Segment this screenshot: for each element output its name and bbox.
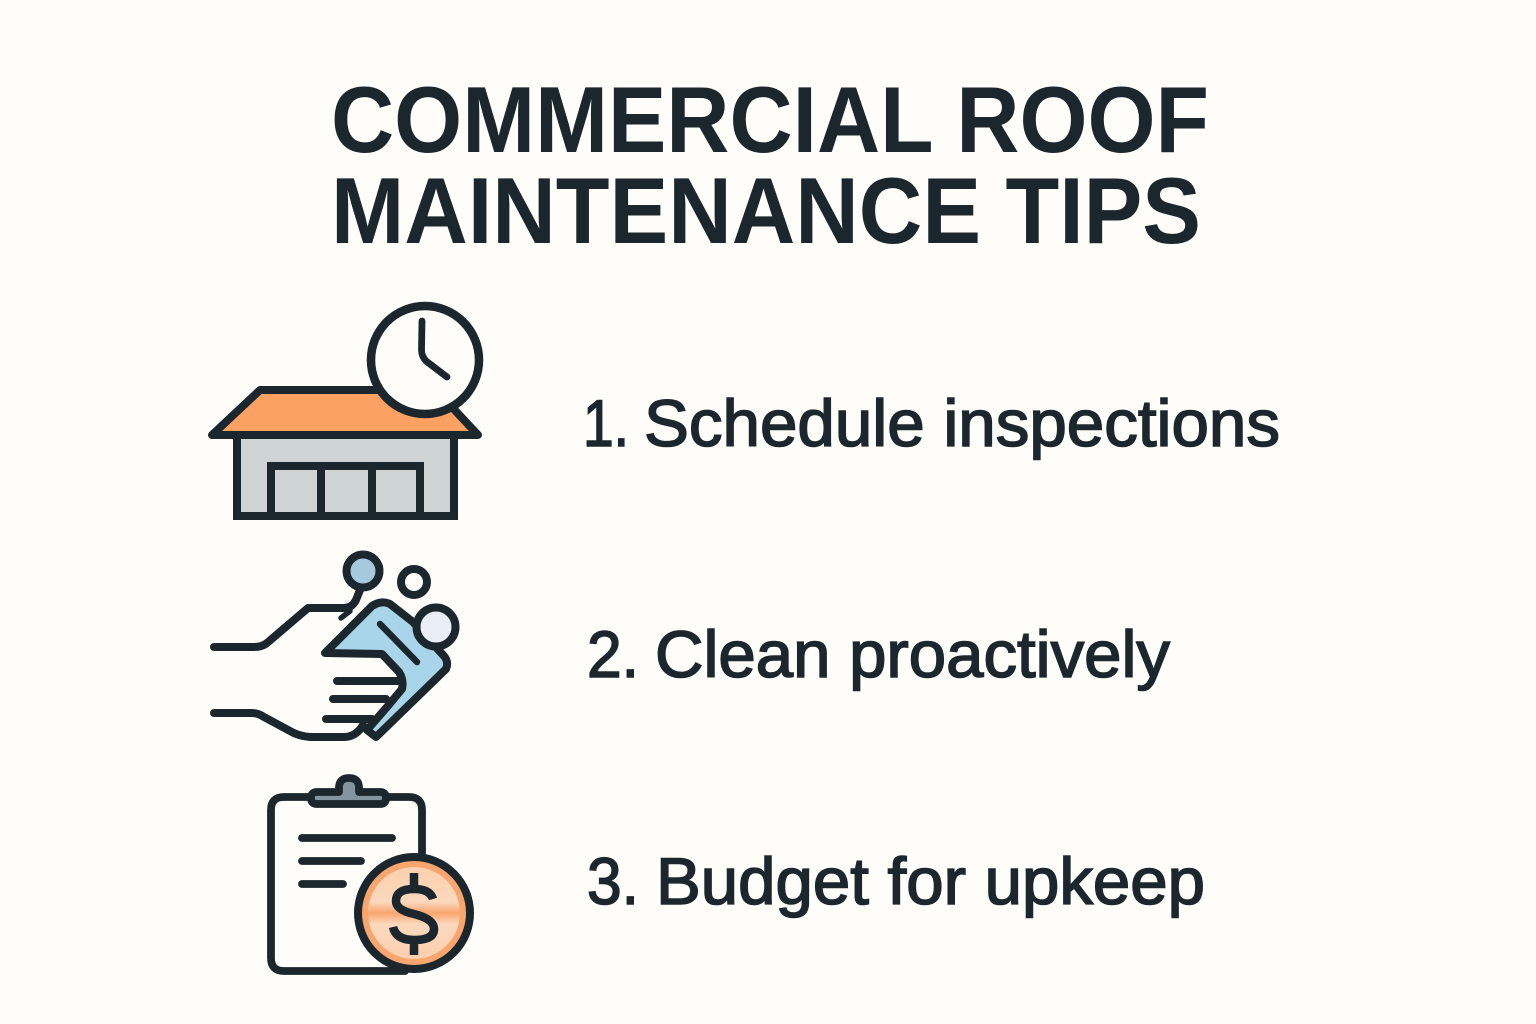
title (331, 67, 1209, 263)
bubble: blue (346, 554, 380, 588)
clock (371, 306, 479, 414)
cloth crease (380, 624, 417, 662)
icon: clipboard with dollar coin (271, 778, 470, 971)
tip 1: 1. (583, 386, 629, 460)
icon: hand cleaning with cloth and bubbles (214, 554, 456, 737)
building wall (237, 435, 454, 516)
text lines (302, 838, 392, 884)
icon: building with clock (212, 306, 479, 516)
hand lower outline (214, 713, 363, 737)
bubble: small (401, 569, 427, 595)
cloth (325, 602, 447, 737)
tip 3: 3. (587, 844, 639, 918)
dollar coin (358, 857, 470, 969)
tip 1: Schedule inspections (644, 386, 1280, 460)
clip (311, 778, 386, 804)
fingers (326, 681, 398, 719)
hand upper outline (214, 590, 360, 647)
title: MAINTENANCE TIPS (331, 158, 1201, 263)
title: COMMERCIAL ROOF (331, 67, 1209, 172)
orange roof (212, 390, 478, 435)
tip 2: 2. (587, 617, 639, 691)
bubble: large (416, 608, 456, 646)
tip 2: Clean proactively (655, 617, 1170, 691)
clipboard (271, 797, 422, 971)
tip 3: Budget for upkeep (656, 844, 1205, 918)
door panels (271, 466, 420, 516)
thumb tick (341, 611, 350, 618)
